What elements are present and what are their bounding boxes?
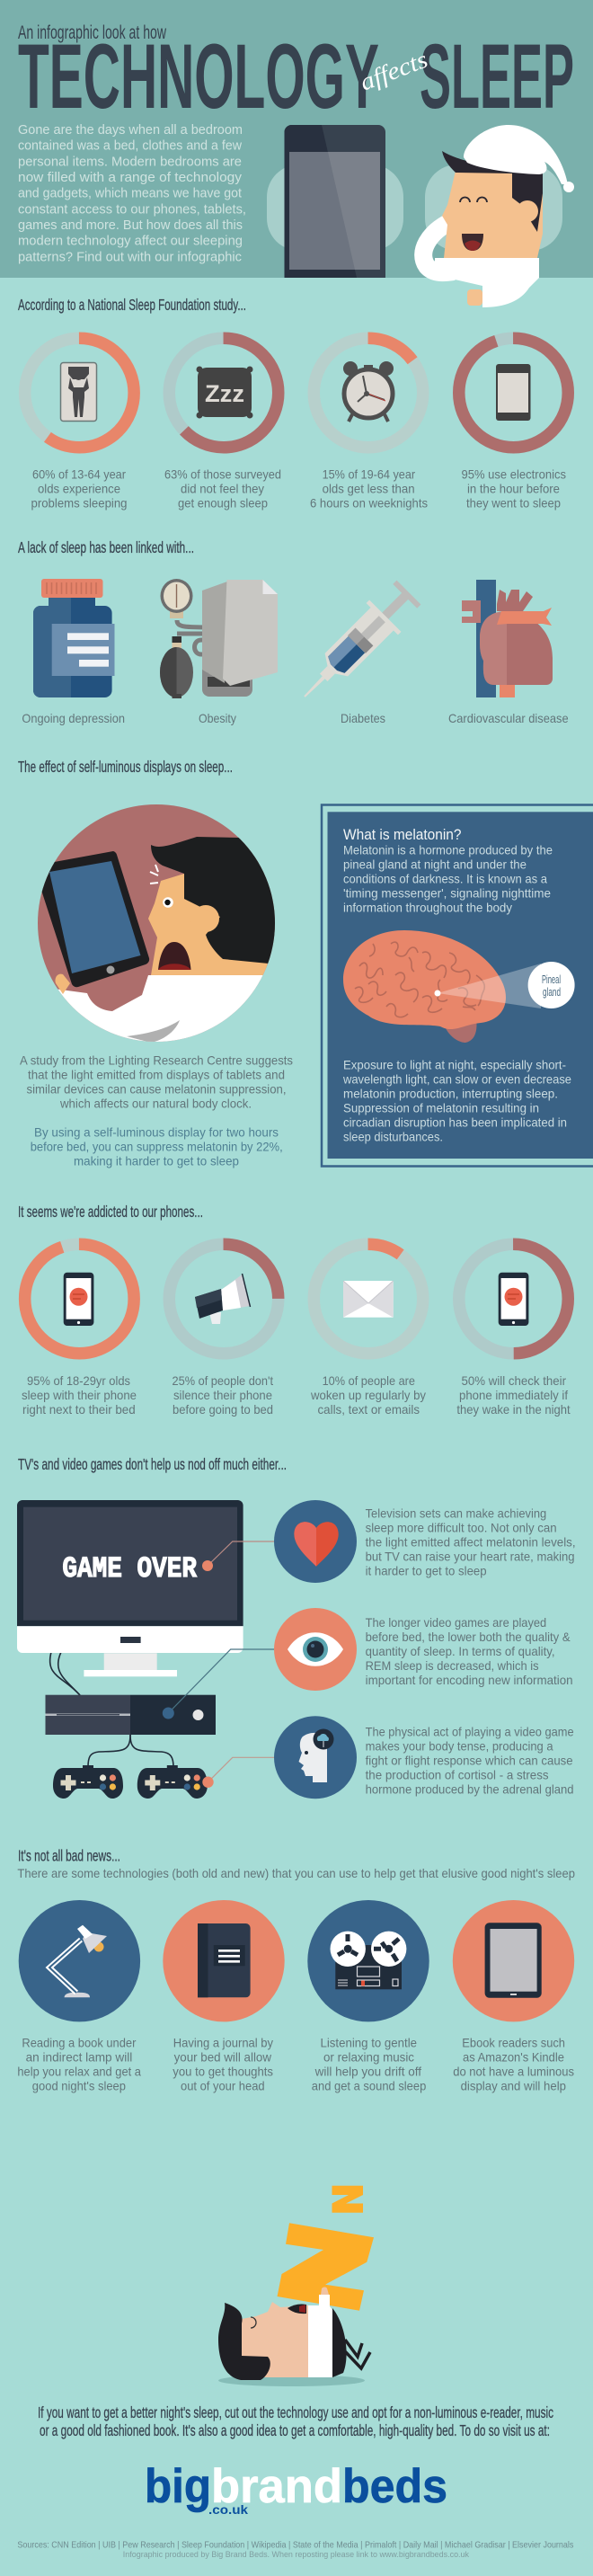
labels: study stats: get enough sleep bbox=[178, 496, 268, 511]
labels: good technologies: help you relax and get a bbox=[17, 2065, 141, 2079]
labels: study stats: 95% use electronics bbox=[462, 467, 566, 482]
text: physical act: fight or flight response which can cause bbox=[366, 1754, 573, 1768]
intro text: patterns? Find out with our infographic bbox=[18, 249, 242, 264]
labels: study stats: 15% of 19-64 year bbox=[323, 467, 415, 482]
heading: good news: It's not all bad news... bbox=[18, 1846, 120, 1864]
intro text: Gone are the days when all a bedroom bbox=[18, 122, 243, 138]
text: video games: important for encoding new information bbox=[366, 1673, 573, 1687]
text: lighting study: similar devices can cause melatonin suppression, bbox=[27, 1081, 286, 1096]
text: television: Television sets can make achieving bbox=[366, 1506, 546, 1520]
heading: phones: It seems we're addicted to our phones... bbox=[18, 1203, 203, 1221]
panel text bottom: Exposure to light at night, especially short- bbox=[343, 1058, 566, 1072]
connector: controller to head bbox=[202, 1757, 274, 1788]
text: television: the light emitted affect melatonin levels, bbox=[366, 1534, 576, 1549]
feet bbox=[343, 2340, 370, 2368]
sources bbox=[17, 2540, 573, 2560]
labels: study stats: 63% of those surveyed bbox=[164, 467, 281, 482]
badge: journal bbox=[163, 1900, 285, 2021]
intro text: games and more. But how does all this bbox=[18, 218, 243, 233]
labels: phone stats: right next to their bed bbox=[22, 1402, 136, 1417]
intro text: and gadgets, which means we have got bbox=[18, 186, 243, 201]
labels: good technologies: you to get thoughts bbox=[173, 2065, 273, 2079]
icon: phone bbox=[496, 364, 530, 421]
illustration: monitor bbox=[17, 1500, 243, 1676]
labels: study stats: 6 hours on weeknights bbox=[310, 496, 428, 511]
text: lighting study: which affects our natural body clock. bbox=[59, 1096, 252, 1110]
logo bbox=[145, 2460, 447, 2517]
icon: pillow zzz: Zzz bbox=[205, 380, 244, 407]
text: physical act: The physical act of playing a video game bbox=[366, 1725, 574, 1739]
text: television: it harder to get to sleep bbox=[366, 1563, 487, 1577]
labels: study stats bbox=[31, 467, 566, 511]
icon: small z bbox=[332, 2186, 363, 2213]
icon: alarm clock bbox=[343, 361, 394, 422]
icon: syringe bbox=[288, 576, 425, 713]
panel text bottom: Suppression of melatonin resulting in bbox=[343, 1101, 539, 1115]
labels: phone stats bbox=[22, 1373, 571, 1417]
panel text bottom bbox=[342, 1058, 571, 1144]
text: physical act bbox=[366, 1725, 574, 1797]
labels: phone stats: 95% of 18-29yr olds bbox=[27, 1373, 130, 1388]
callout: pineal gland beam bbox=[438, 964, 541, 1008]
intro text: modern technology affect our sleeping bbox=[18, 234, 243, 249]
intro text: personal items. Modern bedrooms are bbox=[18, 154, 242, 169]
icon: megaphone bbox=[195, 1274, 250, 1324]
pineal marker bbox=[435, 990, 440, 996]
panel text top bbox=[343, 842, 553, 914]
labels: study stats: 60% of 13-64 year bbox=[32, 467, 126, 482]
header panel bbox=[0, 0, 593, 278]
labels: study stats: olds experience bbox=[38, 482, 120, 496]
illustration: console bbox=[45, 1695, 216, 1735]
labels: phone stats: before going to bed bbox=[173, 1402, 273, 1417]
labels: good technologies: out of your head bbox=[181, 2079, 265, 2093]
labels: study stats: they went to sleep bbox=[466, 496, 561, 511]
text: lighting study: By using a self-luminous display for two hours bbox=[34, 1124, 279, 1139]
icon: phone bbox=[284, 125, 385, 278]
heading: self-luminous: The effect of self-luminous displays on sleep... bbox=[18, 758, 233, 776]
text: television: sleep more difficult too. Not only can bbox=[366, 1520, 557, 1534]
illustration: brain bbox=[343, 930, 506, 1043]
text: lighting study: before bed, you can suppress melatonin by 22%, bbox=[31, 1140, 283, 1154]
illustration: controller left bbox=[53, 1765, 123, 1799]
labels: health risks: Ongoing depression bbox=[22, 711, 125, 725]
logo: .co.uk bbox=[208, 2502, 248, 2517]
labels: good technologies: and get a sound sleep bbox=[312, 2079, 426, 2093]
raised hand bbox=[321, 2287, 329, 2295]
labels: study stats: problems sleeping bbox=[31, 496, 128, 511]
character: sleeping man bbox=[218, 2287, 370, 2386]
icon: eye badge bbox=[274, 1608, 357, 1691]
heading: linked: A lack of sleep has been linked with... bbox=[18, 538, 194, 556]
connector: screen to heart bbox=[202, 1541, 274, 1571]
panel text top: conditions of darkness. It is known as a bbox=[343, 871, 547, 885]
icon: pillow zzz bbox=[196, 367, 253, 419]
icon: person in bed bbox=[61, 363, 97, 421]
text: television: but TV can raise your heart rate, making bbox=[366, 1549, 575, 1563]
kicker: An infographic look at how bbox=[18, 22, 167, 43]
labels: study stats: did not feel they bbox=[181, 482, 264, 496]
labels: good technologies: Listening to gentle bbox=[320, 2036, 417, 2050]
labels: good technologies: your bed will allow bbox=[174, 2050, 272, 2065]
ear bbox=[270, 2362, 286, 2376]
labels: phone stats: 25% of people don't bbox=[173, 1373, 273, 1388]
ring chart: 60 percent bbox=[25, 338, 134, 448]
labels: phone stats: woken up regularly by bbox=[310, 1388, 426, 1402]
text: physical act: hormone produced by the adrenal gland bbox=[366, 1782, 574, 1797]
ring chart: 10 percent bbox=[314, 1244, 423, 1354]
logo: brand bbox=[211, 2460, 342, 2513]
labels: health risks: Diabetes bbox=[341, 711, 385, 725]
labels: phone stats: 10% of people are bbox=[323, 1373, 415, 1388]
legs bbox=[332, 2308, 347, 2377]
text: video games bbox=[366, 1615, 573, 1687]
labels: phone stats: phone immediately if bbox=[459, 1388, 568, 1402]
panel text top: information throughout the body bbox=[343, 900, 512, 914]
icon: blood pressure monitor bbox=[160, 579, 278, 698]
text: lighting study: A study from the Lighting Research Centre suggests bbox=[20, 1053, 293, 1067]
text: video games: The longer video games are played bbox=[366, 1615, 546, 1630]
icon: envelope bbox=[343, 1281, 394, 1318]
icon: large z bbox=[277, 2223, 374, 2311]
labels: good technologies: do not have a luminous bbox=[453, 2065, 574, 2079]
labels: good technologies: display and will help bbox=[461, 2079, 566, 2093]
icon: pill bottle bbox=[33, 579, 115, 697]
ring chart: 63 percent bbox=[169, 338, 279, 448]
panel text bottom: wavelength light, can slow or even decrease bbox=[342, 1072, 571, 1087]
ring chart: 25 percent bbox=[169, 1244, 279, 1354]
callout: pineal gland label: gland bbox=[543, 986, 561, 999]
shadow bbox=[218, 2375, 365, 2386]
panel text top: Melatonin is a hormone produced by the bbox=[343, 842, 553, 857]
illustration: monitor: GAME OVER bbox=[62, 1552, 198, 1586]
icon: phone notification bbox=[499, 1273, 528, 1326]
logo: beds bbox=[342, 2460, 447, 2513]
title script word: affects bbox=[356, 46, 431, 96]
heading: study: According to a National Sleep Foundation study... bbox=[18, 296, 246, 314]
illustration: cables bbox=[50, 1652, 173, 1767]
labels: phone stats: 50% will check their bbox=[462, 1373, 566, 1388]
callout: pineal gland label bbox=[528, 962, 575, 1008]
tongue bbox=[299, 2305, 305, 2313]
badge: lamp bbox=[19, 1900, 140, 2021]
callout: pineal gland label: Pineal bbox=[542, 973, 561, 986]
icon: head badge bbox=[274, 1716, 357, 1799]
panel text top: 'timing messenger', signaling nighttime bbox=[343, 885, 551, 900]
icon: heart bbox=[462, 580, 553, 697]
ring chart: 95 percent bbox=[459, 338, 568, 448]
intro text: now filled with a range of technology bbox=[18, 170, 243, 185]
text: lighting study bbox=[20, 1053, 293, 1168]
intro text: constant access to our phones, tablets, bbox=[18, 201, 246, 217]
labels: good technologies: or relaxing music bbox=[323, 2050, 414, 2065]
text: video games: quantity of sleep. In terms of quality, bbox=[366, 1644, 555, 1658]
labels: study stats: in the hour before bbox=[467, 482, 560, 496]
panel heading: What is melatonin? bbox=[343, 826, 462, 843]
text: video games: REM sleep is decreased, which is bbox=[366, 1658, 539, 1673]
hair bbox=[218, 2303, 270, 2380]
labels: phone stats: they wake in the night bbox=[456, 1402, 571, 1417]
ring chart: 50 percent bbox=[459, 1244, 568, 1354]
intro text: contained was a bed, clothes and a few bbox=[18, 138, 242, 154]
panel: what is melatonin bbox=[322, 805, 593, 1167]
panel text bottom: melatonin production, interrupting sleep. bbox=[343, 1087, 558, 1101]
labels: health risks: Cardiovascular disease bbox=[448, 711, 569, 725]
labels: health risks: Obesity bbox=[199, 711, 236, 725]
pale rounded shapes bbox=[267, 164, 562, 251]
labels: good technologies: good night's sleep bbox=[32, 2079, 126, 2093]
face bbox=[242, 2302, 308, 2377]
character: man in nightcap bbox=[423, 125, 574, 307]
labels: phone stats: silence their phone bbox=[173, 1388, 272, 1402]
panel text bottom: sleep disturbances. bbox=[343, 1130, 443, 1144]
mouth bbox=[288, 2305, 306, 2314]
text: physical act: makes your body tense, producing a bbox=[366, 1739, 553, 1754]
labels: health risks bbox=[22, 711, 569, 725]
labels: phone stats: calls, text or emails bbox=[318, 1402, 420, 1417]
closing text bbox=[38, 2403, 553, 2439]
panel text top: pineal gland at night and under the bbox=[343, 857, 527, 871]
intro text bbox=[18, 122, 246, 264]
labels: good technologies: Reading a book under bbox=[22, 2036, 137, 2050]
labels: phone stats: sleep with their phone bbox=[22, 1388, 137, 1402]
text: lighting study: making it harder to get to sleep bbox=[74, 1154, 239, 1168]
labels: good technologies: as Amazon's Kindle bbox=[463, 2050, 564, 2065]
heading: tv and games: TV's and video games don't help us nod off much either... bbox=[18, 1455, 287, 1473]
labels: study stats: olds get less than bbox=[323, 482, 415, 496]
labels: good technologies: Having a journal by bbox=[173, 2036, 273, 2050]
labels: good technologies: Ebook readers such bbox=[462, 2036, 565, 2050]
illustration: man looking at tablet bbox=[36, 803, 279, 1044]
badge: ebook reader bbox=[453, 1900, 574, 2021]
text: lighting study: that the light emitted from displays of tablets and bbox=[28, 1067, 285, 1081]
text: physical act: the production of cortisol - a stress bbox=[366, 1768, 549, 1782]
text: video games: before bed, the lower both the quality & bbox=[366, 1630, 571, 1644]
illustration: controller right bbox=[137, 1765, 208, 1799]
closed eye bbox=[251, 2317, 256, 2328]
ring chart: 95 percent phones bbox=[25, 1244, 134, 1354]
labels: good technologies bbox=[17, 2036, 574, 2093]
ring chart: 15 percent bbox=[314, 338, 423, 448]
sources: Infographic produced by Big Brand Beds. When reposting please link to www.bigbrandbeds.co.uk bbox=[123, 2550, 469, 2560]
labels: good technologies: an indirect lamp will bbox=[26, 2050, 132, 2065]
logo: big bbox=[145, 2460, 211, 2513]
labels: good technologies: will help you drift off bbox=[314, 2065, 421, 2079]
connector: console to eye bbox=[163, 1649, 274, 1719]
text: television bbox=[366, 1506, 576, 1577]
icon: heart badge bbox=[274, 1500, 357, 1583]
icon: phone notification bbox=[64, 1273, 93, 1326]
shirt bbox=[308, 2295, 332, 2377]
badge: reel to reel bbox=[307, 1900, 429, 2021]
panel text bottom: circadian disruption has been implicated in bbox=[343, 1115, 567, 1130]
